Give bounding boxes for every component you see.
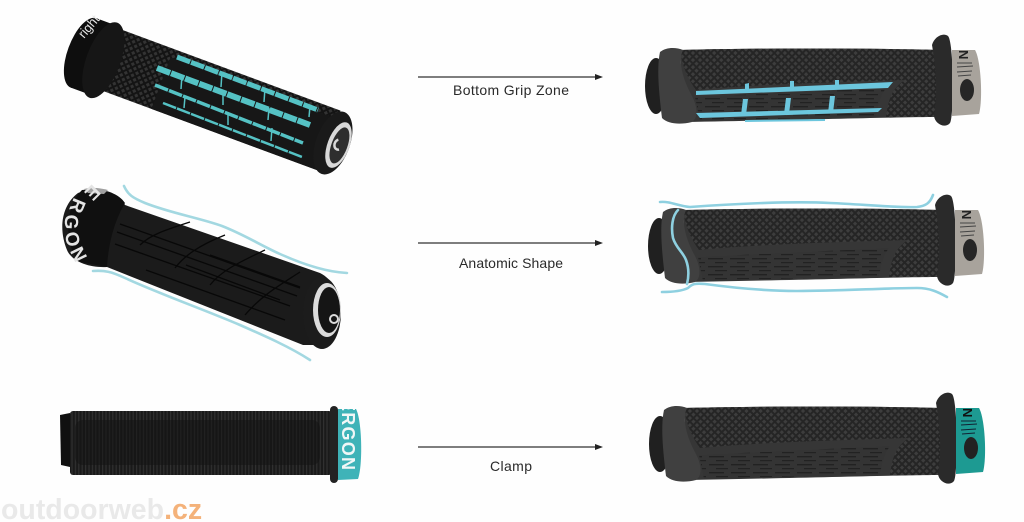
flange <box>330 406 338 483</box>
arrow: bottom grip zone <box>418 74 603 80</box>
clamp scribble <box>961 421 977 434</box>
logo: ERGON: G <box>60 214 81 230</box>
logo: ERGON: R <box>64 195 89 216</box>
grip: anatomic shape, angled view <box>60 180 341 349</box>
clamp bolt <box>964 437 978 459</box>
grip: bottom grip zone, side view <box>645 35 981 126</box>
label: anatomic shape: Anatomic Shape <box>459 255 563 271</box>
grip: clamp, straight view <box>60 399 361 483</box>
rubber ribs <box>115 222 300 320</box>
grip: clamp, side view <box>649 393 985 484</box>
grip: anatomic shape, side view <box>648 195 984 297</box>
clamp mark: N <box>960 408 975 417</box>
end cap <box>303 277 341 349</box>
label: clamp: Clamp <box>490 458 532 474</box>
clamp silver <box>952 50 981 116</box>
clamp scribble <box>960 223 976 236</box>
clamp bolt <box>963 239 977 261</box>
clamp mark: N <box>959 210 974 219</box>
logo: ERGON: O <box>60 230 83 249</box>
arrow: anatomic shape <box>418 240 603 246</box>
clamp text: right: right <box>75 12 103 41</box>
logo: ERGON: ERGON <box>338 399 358 470</box>
logo: ERGON: N <box>65 244 90 265</box>
contour lines <box>93 186 347 360</box>
teal bars <box>155 57 318 157</box>
grip: bottom grip zone, angled view <box>55 10 362 188</box>
contour lines <box>660 195 947 297</box>
arrow: clamp <box>418 444 603 450</box>
label: bottom grip zone: Bottom Grip Zone <box>453 82 569 98</box>
clamp silver <box>955 210 984 276</box>
teal clamp <box>956 408 985 474</box>
clamp mark: N <box>956 50 971 59</box>
clamp bolt <box>960 79 974 101</box>
end ring <box>313 283 341 337</box>
clamp scribble <box>957 63 973 76</box>
teal clamp <box>338 409 361 480</box>
logo: ERGON <box>60 180 104 265</box>
logo: ERGON: E <box>80 180 104 204</box>
blue bars <box>696 80 893 122</box>
